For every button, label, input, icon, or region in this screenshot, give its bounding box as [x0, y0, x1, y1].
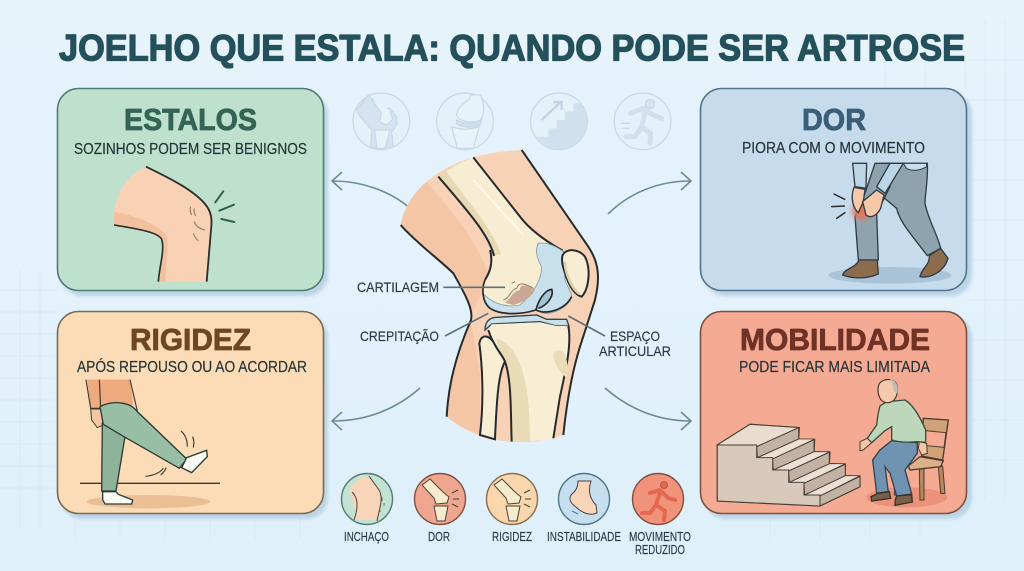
- symptom: dor: DOR: [428, 530, 450, 544]
- tibial cartilage: [485, 315, 569, 330]
- arrow: center to mobilidade: [605, 388, 691, 430]
- leader lines: [443, 285, 505, 290]
- icon: person holding knee: [828, 163, 952, 284]
- patella: [562, 250, 589, 297]
- heading: rigidez: RIGIDEZ: [130, 322, 251, 357]
- symptom: movimento reduzido: [629, 474, 691, 557]
- icon: leg extension: [80, 380, 220, 508]
- femur outlines: [438, 177, 495, 262]
- panel: estalos: [58, 88, 328, 296]
- cartilage and condyle detail: [483, 243, 572, 314]
- panel: dor: [700, 88, 972, 296]
- arrow: center to dor: [608, 172, 691, 214]
- icon row: symptoms: [342, 474, 691, 557]
- symptom: movimento reduzido: REDUZIDO: [635, 543, 685, 557]
- icon: faded knee: [353, 93, 410, 150]
- subheading: rigidez: APÓS REPOUSO OU AO ACORDAR: [77, 359, 307, 376]
- central knee anatomy: [401, 150, 605, 442]
- arrow: center to estalos: [332, 172, 412, 210]
- panel: rigidez: [58, 312, 328, 519]
- label: espaço articular: [599, 328, 671, 359]
- icon: faded stairs: [531, 93, 588, 150]
- label: espaço articular: ARTICULAR: [599, 343, 671, 359]
- icon: bent knee: [114, 167, 234, 282]
- symptom: rigidez: [486, 474, 538, 544]
- heading: dor: DOR: [802, 102, 866, 137]
- symptom: movimento reduzido: MOVIMENTO: [629, 530, 691, 544]
- symptom: inchaço: [342, 474, 392, 544]
- heading: mobilidade: MOBILIDADE: [740, 322, 930, 357]
- faded reference icons: [353, 93, 671, 150]
- fibula: [479, 336, 505, 439]
- symptom: rigidez: RIGIDEZ: [492, 530, 532, 544]
- symptom: instabilidade: INSTABILIDADE: [547, 530, 621, 544]
- arrow: center to rigidez: [332, 388, 420, 430]
- tibia: [488, 322, 569, 442]
- icon: faded joint: [437, 93, 493, 150]
- heading: estalos: ESTALOS: [124, 102, 257, 137]
- label: cartilagem: CARTILAGEM: [357, 279, 439, 295]
- panel: mobilidade: [700, 312, 972, 519]
- skin: [401, 150, 598, 442]
- subheading: mobilidade: PODE FICAR MAIS LIMITADA: [739, 359, 931, 376]
- femur: [438, 157, 570, 313]
- label: espaço articular: ESPAÇO: [610, 328, 660, 344]
- icon: faded runner: [614, 93, 671, 150]
- subheading: estalos: SOZINHOS PODEM SER BENIGNOS: [74, 141, 307, 158]
- symptom: dor: [414, 474, 466, 544]
- title: JOELHO QUE ESTALA: QUANDO PODE SER ARTROSE: [59, 26, 965, 68]
- icon: stairs: [717, 424, 860, 506]
- icon: older man sitting: [860, 379, 948, 507]
- symptom: inchaço: INCHAÇO: [344, 530, 389, 544]
- skin outline: [522, 150, 598, 435]
- subheading: dor: PIORA COM O MOVIMENTO: [742, 140, 925, 157]
- label: crepitação: CREPITAÇÃO: [360, 328, 439, 344]
- symptom: instabilidade: [547, 474, 621, 544]
